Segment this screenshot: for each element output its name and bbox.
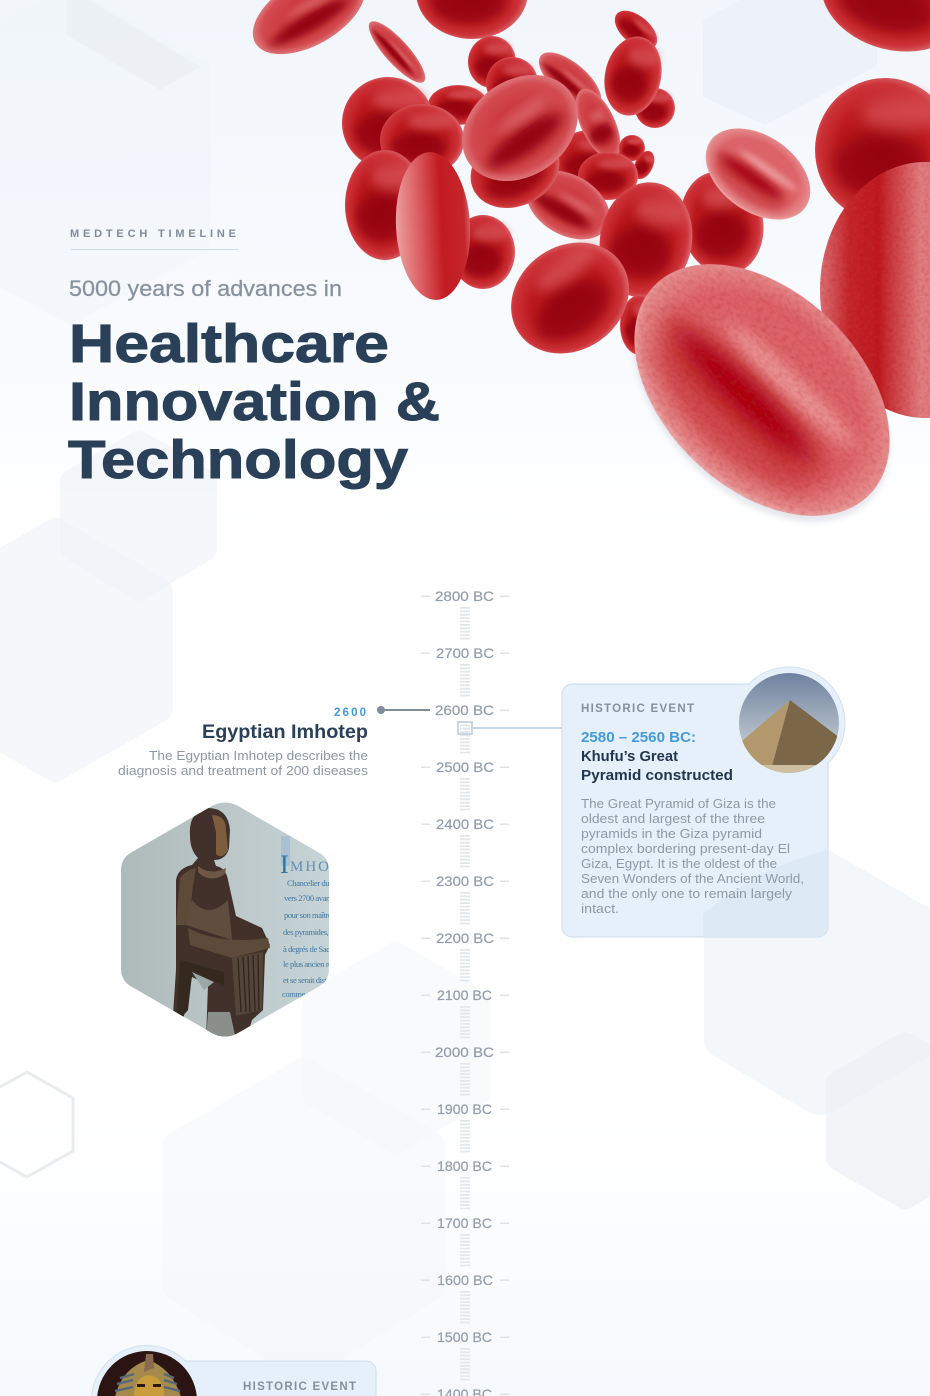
title: Technology: [68, 430, 408, 490]
panel: historic event Khufu: Pyramid constructed: [581, 768, 733, 784]
panel: historic event Khufu: intact.: [581, 902, 619, 916]
panel: historic event Khufu: pyramids in the Giza pyramid: [581, 827, 762, 841]
panel: historic event Khufu: HISTORIC EVENT: [581, 703, 694, 715]
axis year labels: 2300 BC: [436, 873, 494, 889]
panel: historic event Khufu: [562, 667, 845, 937]
panel: historic event Khufu: Giza, Egypt. It is the oldest of the: [581, 857, 777, 871]
panel: historic event Khufu: Seven Wonders of the Ancient World,: [581, 872, 804, 886]
axis year labels: 1900 BC: [437, 1101, 492, 1117]
timeline axis: [421, 588, 509, 1396]
axis year labels: 1600 BC: [437, 1272, 493, 1288]
axis year labels: 1800 BC: [437, 1158, 492, 1174]
panel: historic event Khufu: Khufu’s Great: [581, 749, 678, 765]
image: Tutankhamun mask circle: [97, 1348, 197, 1396]
plaque text: des pyramides,: [283, 927, 329, 937]
axis year labels: 2100 BC: [437, 987, 492, 1003]
axis ticks: [421, 596, 509, 1395]
connector: 2600 dot to axis: [377, 706, 430, 714]
text block: Egyptian Imhotep: diagnosis and treatment of 200 diseases: [118, 764, 368, 778]
text block: Egyptian Imhotep: Egyptian Imhotep: [202, 722, 368, 743]
connector: marker to historic event card: [458, 722, 562, 734]
panel: historic event bottom: [92, 1346, 376, 1396]
red blood cells illustration: [239, 0, 930, 571]
plaque text: MHOT: [290, 859, 342, 875]
axis year labels: 2200 BC: [436, 930, 494, 946]
plaque text: Chancelier du roi: [287, 878, 340, 888]
axis year labels: 2000 BC: [435, 1044, 494, 1060]
image: Great Pyramid circle: [739, 673, 839, 773]
axis year labels: 1700 BC: [437, 1215, 492, 1231]
plaque text: [280, 836, 329, 997]
axis year labels: 2800 BC: [435, 588, 494, 604]
plaque text: comme médecin: [282, 989, 334, 999]
axis year labels: [435, 588, 494, 1396]
panel: historic event Khufu: complex bordering present-day El: [581, 842, 790, 856]
title: Healthcare: [69, 314, 389, 374]
axis year labels: 2400 BC: [436, 816, 494, 832]
axis stripes: [460, 607, 470, 1382]
plaque text: I: [280, 850, 289, 879]
panel: historic event Khufu: 2580 – 2560 BC:: [581, 730, 696, 746]
subtitle: 5000 years of advances in: [69, 276, 342, 301]
panel: historic event bottom: HISTORIC EVENT: [243, 1381, 356, 1393]
title: Innovation &: [69, 372, 440, 432]
title: [68, 314, 440, 490]
panel: historic event Khufu: and the only one to remain largely: [581, 887, 793, 901]
statue: [172, 808, 270, 1040]
panel: historic event Khufu: oldest and largest of the three: [581, 812, 765, 826]
text block: Egyptian Imhotep: [118, 707, 368, 778]
text block: Egyptian Imhotep: 2600: [334, 707, 366, 719]
plaque text: et se serait distin: [283, 975, 333, 985]
image: Imhotep statue hexagon: [121, 802, 329, 1036]
text block: Egyptian Imhotep: The Egyptian Imhotep describes the: [149, 749, 368, 763]
plaque text: à degrés de Saq: [283, 944, 331, 954]
plaque text: pour son maître: [284, 910, 332, 920]
axis year labels: 2700 BC: [436, 645, 494, 661]
panel: historic event Khufu: The Great Pyramid of Giza is the: [581, 797, 776, 811]
plaque text: vers 2700 avant: [284, 893, 333, 903]
axis year labels: 2600 BC: [435, 702, 494, 718]
eyebrow: medtech timeline: MEDTECH TIMELINE: [70, 228, 236, 240]
axis year labels: 2500 BC: [436, 759, 494, 775]
axis year labels: 1500 BC: [437, 1329, 492, 1345]
plaque text: le plus ancien re: [283, 959, 332, 969]
